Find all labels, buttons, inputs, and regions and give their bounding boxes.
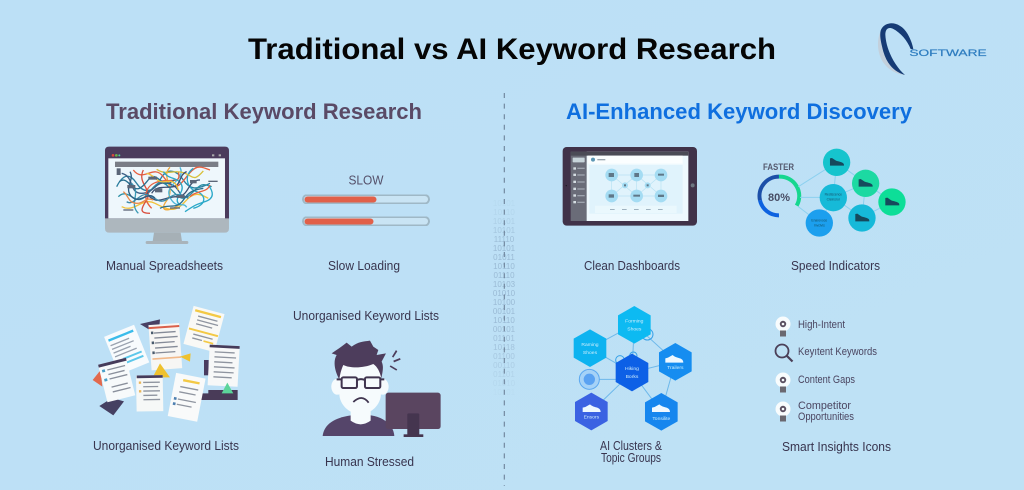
AI clusters hexagon network: Ensors <box>584 414 600 420</box>
speed indicator: 80% faster ring <box>759 162 799 215</box>
binary code column: 10100 <box>493 298 516 307</box>
smart insight: keyword search <box>776 344 878 362</box>
binary code column: 01101 <box>493 334 515 343</box>
binary code column: 10101 <box>493 388 516 397</box>
progress bar: slow loading 1 <box>303 195 429 204</box>
center divider <box>503 93 505 486</box>
network of shoe nodes <box>798 149 906 237</box>
binary code column: 10118 <box>493 343 515 352</box>
AI clusters hexagon network: Shoes <box>627 326 642 332</box>
smart insight: high-intent <box>776 316 845 336</box>
title: Traditional vs AI Keyword Research <box>248 33 776 66</box>
icon: bulb <box>776 372 790 392</box>
label: AI clusters and topic groups <box>600 439 663 465</box>
smart insight: keyword search: Keyıtent Keywords <box>798 346 878 358</box>
AI clusters hexagon network: Trailers <box>667 365 684 371</box>
text: 80 percent: 80% <box>768 192 790 204</box>
icon: bulb <box>776 316 790 336</box>
smart insight: competitor opportunities: Competitor <box>798 400 851 412</box>
icon: scattered keyword papers <box>93 306 240 422</box>
label: manual spreadsheets: Manual Spreadsheets <box>106 259 223 273</box>
AI clusters hexagon network: Tonsilite <box>652 416 671 422</box>
binary code column: 10101 <box>493 244 516 253</box>
binary code column: 10101 <box>493 199 516 208</box>
label: AI clusters and topic groups: AI Clusters & <box>600 439 663 453</box>
binary code column: 01010 <box>493 379 516 388</box>
binary code column: 01110 <box>493 271 515 280</box>
label: slow loading: Slow Loading <box>328 259 400 273</box>
label: unorganised keyword lists (right): Unorganised Keyword Lists <box>293 309 439 323</box>
binary code column: 00101 <box>493 325 516 334</box>
smart insight: content gaps <box>776 372 856 392</box>
smart insight: competitor opportunities: Opportunities <box>798 411 855 423</box>
network of shoe nodes: Rediscence <box>825 193 842 197</box>
AI clusters hexagon network <box>574 306 692 431</box>
label: unorganised keyword lists (left): Unorganised Keyword Lists <box>93 439 239 453</box>
smart insight: content gaps: Content Gaps <box>798 374 856 386</box>
binary code column: 10110 <box>493 262 515 271</box>
binary code column: 01101 <box>493 370 515 379</box>
label: clean dashboards: Clean Dashboards <box>584 259 680 273</box>
binary code column: 10110 <box>493 316 515 325</box>
binary code column: 00101 <box>493 307 516 316</box>
binary code column: 01100 <box>493 352 515 361</box>
network of shoe nodes: Cleinsror <box>827 197 841 201</box>
AI clusters hexagon network: Borks <box>626 374 639 380</box>
AI clusters hexagon network: Raming <box>581 342 599 348</box>
icon: bulb <box>776 402 790 422</box>
text: slow: SLOW <box>348 172 384 188</box>
AI clusters hexagon network: Shoes <box>583 350 598 356</box>
label: speed indicators: Speed Indicators <box>791 259 880 273</box>
label: AI clusters and topic groups: Topic Groups <box>601 451 661 465</box>
binary code column <box>493 199 516 397</box>
label: smart insights icons: Smart Insights Icons <box>782 440 891 454</box>
AI clusters hexagon network: Hiking <box>625 366 639 372</box>
smart insight: competitor opportunities <box>776 400 855 423</box>
ring gauge <box>759 177 799 215</box>
binary code column: 10110 <box>493 208 515 217</box>
AI clusters hexagon network: Forming <box>625 319 644 325</box>
logo: Software: SOFTWARE <box>909 48 987 58</box>
binary code column: 11110 <box>494 235 515 244</box>
heading: AI-enhanced keyword discovery: AI-Enhanced Keyword Discovery <box>566 99 912 124</box>
logo: Software <box>878 23 987 75</box>
icon: magnifier <box>776 344 792 362</box>
binary code column: 01010 <box>493 289 516 298</box>
progress bar: slow loading 2 <box>303 217 429 226</box>
binary code column: 10103 <box>493 280 516 289</box>
smart insight: high-intent: High-Intent <box>798 319 845 331</box>
network of shoe nodes: Enarevoce <box>811 219 827 223</box>
label: human stressed: Human Stressed <box>325 455 414 469</box>
binary code column: 00110 <box>493 361 515 370</box>
icon: monitor with tangled spreadsheet <box>105 147 229 244</box>
binary code column: 10101 <box>493 217 516 226</box>
network of shoe nodes: Invcivis <box>814 223 825 227</box>
icon: tablet dashboard <box>563 147 697 226</box>
binary code column: 10101 <box>493 226 516 235</box>
icon: stressed person at computer <box>323 341 441 437</box>
heading: traditional keyword research: Traditional Keyword Research <box>106 99 422 124</box>
text: faster: FASTER <box>763 162 794 173</box>
binary code column: 01011 <box>493 253 515 262</box>
